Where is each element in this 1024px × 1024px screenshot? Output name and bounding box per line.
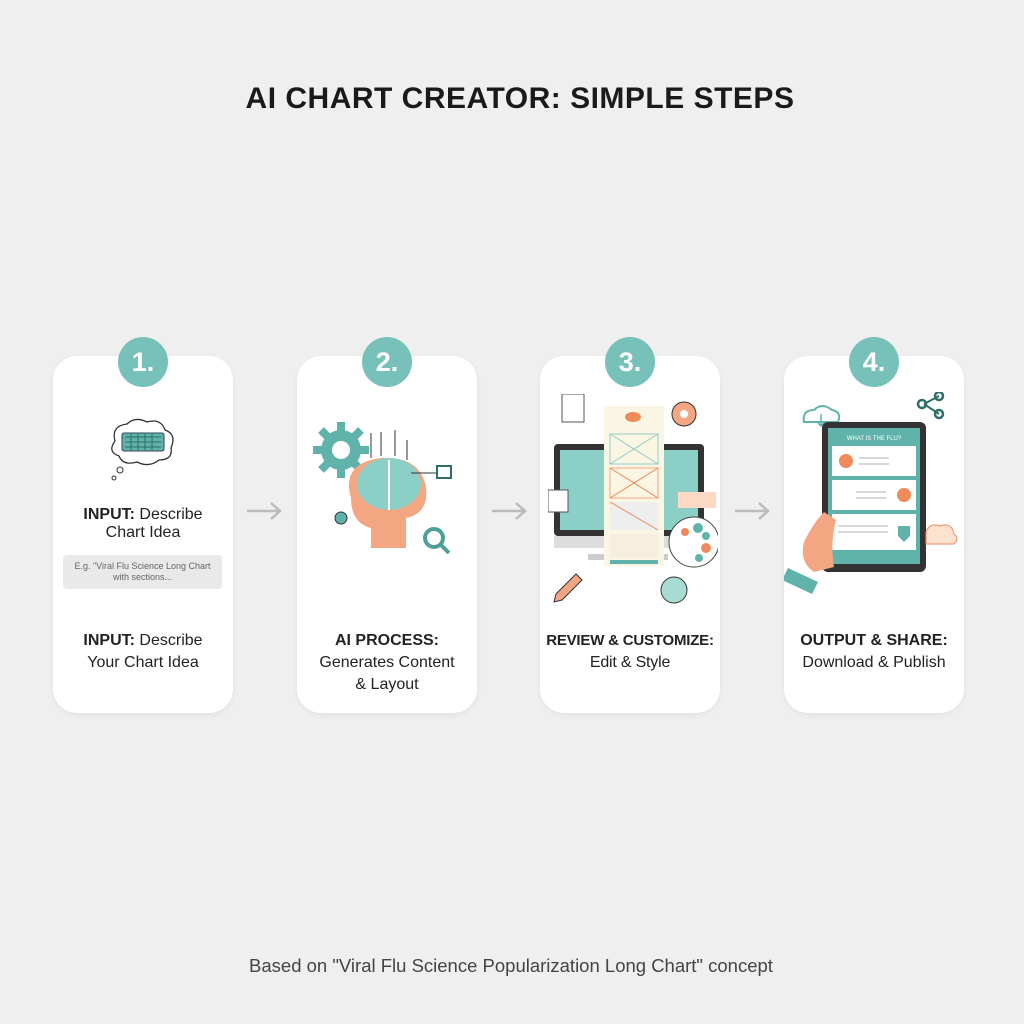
panel: step 1 bbox=[53, 356, 233, 713]
badge 1 bbox=[118, 337, 168, 387]
badge 3 bbox=[605, 337, 655, 387]
icon: hand holding tablet bbox=[784, 392, 958, 594]
arrow 1 bbox=[247, 502, 282, 520]
text: step 4 caption: Download & Publish bbox=[802, 654, 946, 671]
badge 2 bbox=[362, 337, 412, 387]
panel: step 3 bbox=[540, 356, 720, 713]
footer note: Based on "Viral Flu Science Popularization Long Chart" concept bbox=[249, 955, 773, 976]
badge 4: 4. bbox=[863, 347, 885, 377]
icon: brain with gear bbox=[313, 422, 452, 554]
panel: step 4 bbox=[784, 356, 964, 713]
text: input heading: INPUT: Describe bbox=[83, 506, 203, 523]
text: step 2 caption: AI PROCESS: bbox=[335, 632, 439, 649]
text: step 1 caption bbox=[83, 632, 203, 671]
badge 3: 3. bbox=[619, 347, 641, 377]
text: step 3 caption: REVIEW & CUSTOMIZE: bbox=[546, 632, 714, 649]
arrow 2 bbox=[492, 502, 527, 520]
arrow 3 bbox=[735, 502, 770, 520]
text: input heading bbox=[83, 506, 203, 541]
input example box: E.g. "Viral Flu Science Long Chart bbox=[74, 561, 211, 571]
text: step 2 caption: & Layout bbox=[355, 676, 419, 693]
panel: step 2 bbox=[297, 356, 477, 713]
text: step 4 caption bbox=[800, 632, 948, 671]
icon: thought bubble keyboard bbox=[111, 418, 174, 480]
text: step 1 caption: INPUT: Describe bbox=[83, 632, 203, 649]
icon: hand holding tablet: WHAT IS THE FLU? bbox=[847, 436, 902, 442]
badge 4 bbox=[849, 337, 899, 387]
text: step 3 caption bbox=[546, 632, 714, 671]
badge 2: 2. bbox=[376, 347, 398, 377]
input example box bbox=[63, 555, 222, 589]
input example box: with sections... bbox=[113, 572, 172, 582]
text: step 2 caption: Generates Content bbox=[319, 654, 455, 671]
title: AI CHART CREATOR: SIMPLE STEPS bbox=[246, 82, 794, 115]
text: step 3 caption: Edit & Style bbox=[590, 654, 670, 671]
icon: monitor with long chart editor bbox=[548, 394, 718, 604]
text: step 2 caption bbox=[319, 632, 455, 693]
text: step 4 caption: OUTPUT & SHARE: bbox=[800, 632, 948, 649]
text: step 1 caption: Your Chart Idea bbox=[87, 654, 199, 671]
text: input heading: Chart Idea bbox=[106, 524, 180, 541]
badge 1: 1. bbox=[132, 347, 154, 377]
